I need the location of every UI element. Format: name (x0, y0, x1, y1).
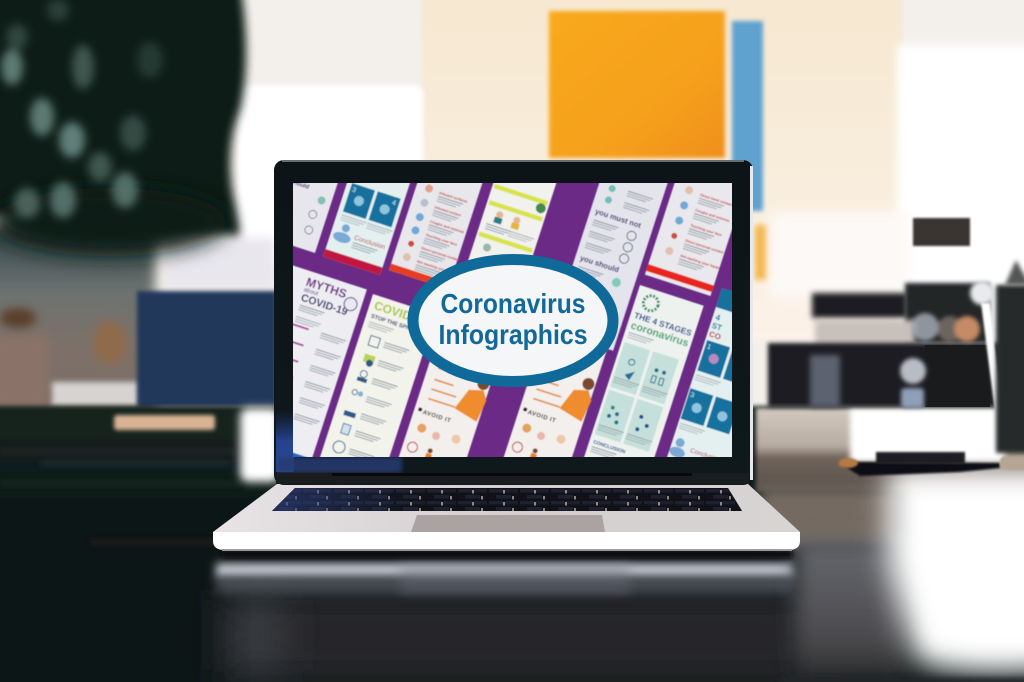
icon: coughing person (559, 378, 595, 422)
screen (293, 183, 732, 457)
card: top left: you should (277, 175, 310, 191)
table wood streaks (0, 450, 240, 544)
card: 4 stages covid right (666, 288, 732, 457)
table surface (0, 406, 1024, 682)
card: you must not: you should (579, 253, 621, 274)
window: bright right (897, 45, 1024, 345)
keyboard (272, 488, 742, 512)
white monitor stand (981, 303, 1003, 412)
card: 4 stages covid right: ST (711, 321, 723, 333)
orange lower stripe (755, 225, 767, 280)
card: prevention rows right: Direct hand contact (700, 193, 733, 207)
icon: doctor (341, 224, 350, 233)
card: 4 stages covid right: 3 (689, 392, 695, 400)
card: avoid it left (398, 361, 491, 457)
card: the 4 stages coronavirus: THE 4 STAGES (633, 310, 693, 338)
card: prevention rows: Infected surfaces (439, 191, 468, 204)
lower left wall (0, 225, 155, 415)
card: 3 and 4 conclusion: Conclusion (353, 235, 386, 251)
card: 4 stages covid right: Conclusion (689, 447, 722, 464)
card: the 4 stages coronavirus (583, 284, 704, 457)
blue wall stripe (732, 21, 763, 211)
card: prevention rows right: Coughs and sneezes (695, 208, 730, 223)
card: prevention rows right: Not washing your hands (680, 254, 721, 271)
laptop base (213, 484, 800, 558)
icon: coughing person (454, 383, 490, 422)
card: prevention rows: Touching your face (425, 233, 458, 247)
tan pot (0, 335, 48, 407)
window: bright left (237, 85, 423, 265)
card: 4 stages covid right: 4 (714, 313, 722, 323)
card: prevention rows: Infected contact (434, 205, 462, 218)
card: myths about covid-19: MYTHS (304, 275, 349, 301)
card: top left (293, 183, 338, 254)
cream wall (422, 0, 902, 340)
laptop reflection (216, 563, 794, 578)
card: prevention rows right (644, 183, 732, 296)
card: prevention rows right: Direct personal contact (685, 239, 725, 255)
gold object on table (114, 415, 215, 430)
lid (274, 160, 753, 485)
pen on table (838, 452, 1024, 476)
right table area (756, 408, 1024, 492)
white glare beside laptop (240, 408, 280, 482)
laptop (213, 120, 800, 558)
card: prevention rows (388, 183, 484, 283)
card: avoid it right: AVOID IT (527, 410, 557, 425)
table centre below laptop (225, 590, 815, 682)
dark right block (996, 285, 1024, 453)
icon: virus (641, 294, 660, 313)
card: covid stop the spread: STOP THE SPREAD (370, 314, 422, 336)
title: Coronavirus: Coronavirus (440, 288, 586, 319)
orange wall panel (549, 11, 725, 158)
card: myths about covid-19: CONCLUSION (258, 429, 292, 445)
card: prevention rows: Coughs and sneezes (429, 220, 465, 234)
title ellipse (413, 260, 613, 382)
card: prevention rows right: Touching your face (690, 223, 722, 237)
card: prevention rows: Direct personal contact (421, 246, 461, 263)
card: avoid it left: AVOID IT (422, 410, 452, 425)
blue chair (137, 291, 277, 407)
card: you must not (572, 183, 668, 352)
plant (0, 0, 246, 256)
trackpad (411, 515, 605, 532)
bokeh lights (900, 281, 994, 408)
card: 3 and 4 conclusion: 3 (351, 186, 357, 194)
card: 3 and 4 conclusion (322, 183, 411, 276)
card: 3 and 4 conclusion: 4 (391, 199, 397, 207)
card: myths about covid-19 (293, 264, 368, 457)
card: myths about covid-19: about (303, 287, 319, 298)
right furniture (768, 218, 1024, 476)
white glare lower right (888, 468, 1024, 672)
card: yellow headings (467, 183, 558, 260)
card: 4 stages covid right: 1 (706, 343, 712, 351)
blue screen reflection (276, 410, 294, 472)
card: covid stop the spread (319, 294, 423, 457)
card: 4 stages covid right: CO (708, 330, 722, 342)
card: you must not: you must not (594, 207, 643, 230)
card: covid stop the spread: COVID-19 (373, 298, 430, 329)
card: myths about covid-19: COVID-19 (299, 292, 349, 318)
title: Infographics: Infographics (438, 319, 588, 350)
card: the 4 stages coronavirus: coronavirus (629, 320, 690, 350)
background: blurred office (0, 0, 1024, 420)
card: prevention rows: Not washing your hands (416, 259, 457, 276)
card: the 4 stages coronavirus: CONCLUSION (592, 439, 626, 456)
card: avoid it right (503, 310, 620, 457)
